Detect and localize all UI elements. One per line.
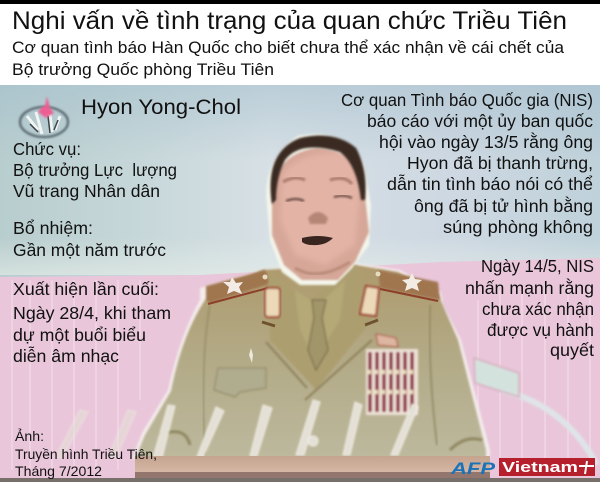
position: Bộ trưởng Lực lượng bbox=[13, 160, 177, 180]
right column: NIS follow-up: chưa xác nhận bbox=[482, 299, 594, 319]
appointed bbox=[13, 218, 166, 260]
right column: NIS report: báo cáo với một ủy ban quốc bbox=[367, 111, 593, 131]
right column: NIS follow-up: Ngày 14/5, NIS bbox=[481, 256, 594, 276]
position: Chức vụ: bbox=[13, 139, 81, 159]
last seen: diễn âm nhạc bbox=[13, 345, 119, 366]
microphones bbox=[55, 400, 418, 458]
photo credit: Truyền hình Triều Tiên, bbox=[15, 446, 157, 462]
right column: NIS report: ông đã bị tử hình bằng bbox=[414, 195, 593, 216]
medals bbox=[366, 334, 418, 415]
last seen: dự một buổi biểu bbox=[13, 325, 146, 345]
right column: NIS report: dẫn tin tình báo nói có thể bbox=[387, 173, 593, 194]
right column: NIS follow-up bbox=[465, 256, 594, 360]
head and face bbox=[266, 134, 371, 285]
right column: NIS report bbox=[341, 90, 593, 237]
top black edge bbox=[0, 0, 600, 4]
subtitle: Bộ trưởng Quốc phòng Triều Tiên bbox=[12, 60, 274, 79]
right column: NIS report: Cơ quan Tình báo Quốc gia (NIS) bbox=[341, 90, 593, 110]
photo credit: Tháng 7/2012 bbox=[15, 463, 102, 479]
right microphone bbox=[474, 358, 597, 465]
logo: AFP Vietnam+: AFP bbox=[450, 459, 496, 478]
right column: NIS follow-up: quyết bbox=[550, 340, 594, 360]
right column: NIS follow-up: nhấn mạnh rằng bbox=[465, 277, 594, 298]
appointed: Bổ nhiệm: bbox=[13, 218, 93, 238]
shoulder stars and collar insignia bbox=[223, 272, 422, 363]
right column: NIS report: hội vào ngày 13/5 rằng ông bbox=[379, 131, 593, 152]
position: Vũ trang Nhân dân bbox=[13, 181, 160, 201]
logo: AFP Vietnam+: Vietnam bbox=[502, 459, 578, 476]
right column: NIS follow-up: được vụ hành bbox=[487, 320, 594, 340]
name: Hyon Yong-Chol bbox=[81, 96, 241, 119]
title: Nghi vấn về tình trạng của quan chức Triều Tiên bbox=[12, 7, 567, 35]
right column: NIS report: súng phòng không bbox=[443, 217, 593, 237]
logo: AFP Vietnam+ bbox=[450, 458, 595, 478]
desk bbox=[0, 456, 600, 482]
last seen: Xuất hiện lần cuối: bbox=[13, 279, 159, 299]
left column: profile bbox=[13, 96, 241, 366]
subtitle bbox=[12, 38, 565, 79]
last seen bbox=[13, 279, 171, 366]
subtitle: Cơ quan tình báo Hàn Quốc cho biết chưa thể xác nhận về cái chết của bbox=[12, 38, 565, 57]
appointed: Gần một năm trước bbox=[13, 240, 166, 260]
icon: party emblem bbox=[20, 96, 68, 137]
position bbox=[13, 139, 177, 201]
last seen: Ngày 28/4, khi tham bbox=[13, 303, 171, 323]
right column: NIS report: Hyon đã bị thanh trừng, bbox=[407, 153, 593, 173]
photo credit: Ảnh: bbox=[15, 428, 44, 444]
photo credit bbox=[15, 428, 157, 479]
body and uniform bbox=[132, 262, 490, 459]
